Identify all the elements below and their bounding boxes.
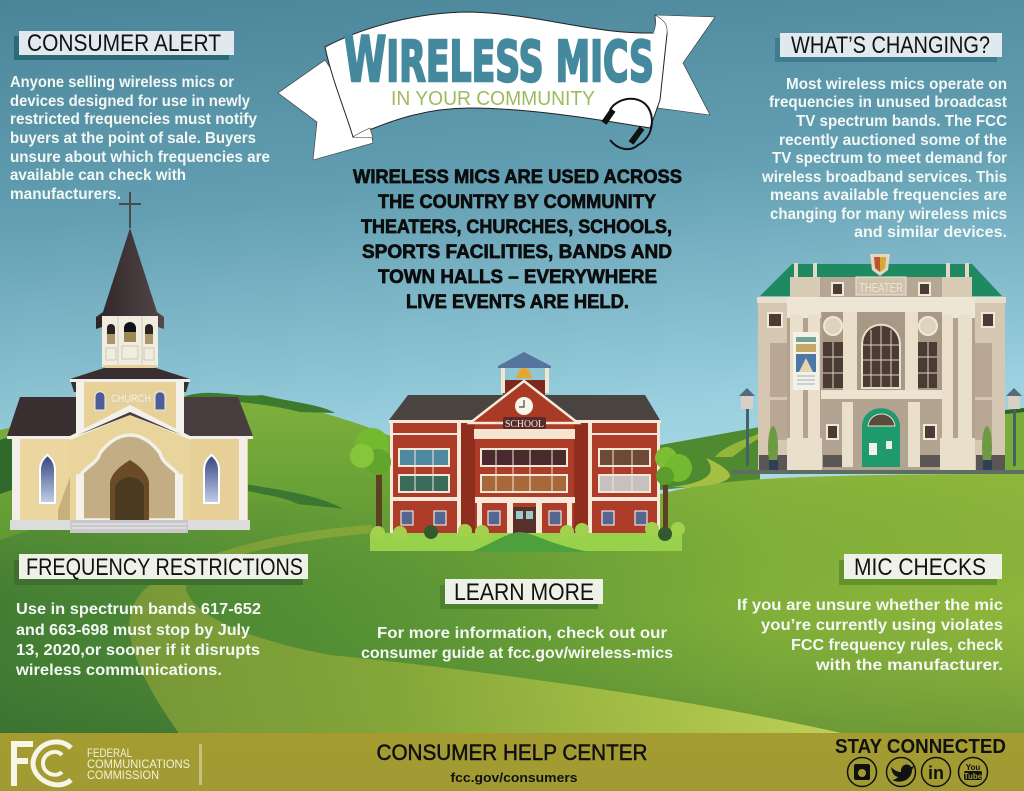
theater plinth stones bbox=[759, 455, 1005, 470]
body: what's changing: means available frequencies are bbox=[770, 187, 1007, 204]
body: learn more bbox=[361, 625, 673, 662]
icon: linkedin bbox=[922, 758, 950, 786]
heading: mic checks: MIC CHECKS bbox=[854, 554, 986, 581]
school walkway bbox=[470, 532, 590, 552]
school roof bbox=[389, 395, 660, 420]
body: consumer alert: manufacturers. bbox=[10, 186, 121, 203]
panel: frequency restrictions bbox=[14, 554, 308, 679]
body: learn more: For more information, check out our bbox=[377, 625, 667, 642]
school gable and clock bbox=[470, 381, 578, 439]
theater windows bbox=[768, 283, 994, 439]
icon: youtube bbox=[958, 758, 988, 786]
school entrance bbox=[475, 497, 575, 533]
theater poster bbox=[793, 332, 819, 390]
banner bbox=[278, 12, 715, 160]
body: what's changing: and similar devices. bbox=[854, 224, 1007, 241]
body: what's changing bbox=[761, 76, 1007, 241]
school sign: SCHOOL bbox=[505, 418, 544, 430]
body: what's changing: TV spectrum bands. The FCC bbox=[796, 113, 1007, 130]
theater crest bbox=[870, 254, 890, 276]
heading: frequency restrictions: FREQUENCY RESTRICTIONS bbox=[26, 554, 303, 581]
body: what's changing: changing for many wireless mics bbox=[770, 206, 1007, 223]
body: consumer alert: unsure about which frequencies are bbox=[10, 149, 270, 166]
panel: learn more bbox=[361, 579, 673, 662]
banner title: WIRELESS MICS bbox=[344, 23, 654, 96]
body: frequency restrictions: Use in spectrum bands 617-652 bbox=[16, 601, 261, 618]
body: mic checks bbox=[737, 597, 1003, 674]
logo: FCC bbox=[14, 742, 71, 786]
church cross bbox=[119, 192, 141, 228]
body: mic checks: FCC frequency rules, check bbox=[791, 637, 1003, 654]
panel: mic checks bbox=[737, 554, 1003, 674]
church tower wall bbox=[70, 368, 190, 438]
panel: what's changing bbox=[761, 32, 1007, 241]
icon: instagram bbox=[848, 758, 876, 786]
consumer help center bbox=[376, 740, 648, 785]
FCC name: FEDERAL bbox=[87, 748, 133, 760]
church roofs bbox=[7, 397, 253, 436]
theater columns bbox=[787, 312, 975, 470]
school shrubs bbox=[371, 522, 685, 541]
theater cypress trees bbox=[768, 426, 992, 470]
church spire bbox=[96, 228, 164, 329]
school cupola bbox=[498, 352, 551, 398]
school lower windows bbox=[401, 511, 647, 525]
building: church bbox=[7, 192, 253, 533]
body: frequency restrictions: wireless communications. bbox=[15, 662, 222, 679]
banner subtitle: IN YOUR COMMUNITY bbox=[391, 88, 595, 110]
icon: headset bbox=[604, 99, 652, 149]
heading: what's changing: WHAT’S CHANGING? bbox=[791, 32, 990, 59]
school trees bbox=[350, 428, 692, 532]
school classroom windows bbox=[398, 448, 651, 493]
body: consumer alert: available can check with bbox=[10, 167, 186, 184]
body: mic checks: you’re currently using violates bbox=[761, 617, 1003, 634]
icon: linkedin: in bbox=[928, 763, 944, 783]
body: frequency restrictions: 13, 2020,or sooner if it disrupts bbox=[16, 642, 260, 659]
central statement: THE COUNTRY BY COMMUNITY bbox=[378, 191, 656, 213]
body: mic checks: If you are unsure whether the mic bbox=[737, 597, 1003, 614]
landscape bbox=[0, 393, 1024, 740]
FCC name bbox=[87, 748, 190, 782]
church porch bbox=[68, 405, 192, 521]
body: frequency restrictions: and 663-698 must stop by July bbox=[16, 622, 250, 639]
body: consumer alert: Anyone selling wireless mics or bbox=[10, 74, 234, 91]
body: consumer alert bbox=[10, 74, 270, 203]
body: what's changing: TV spectrum to meet demand for bbox=[772, 150, 1007, 167]
central statement bbox=[353, 166, 682, 313]
school walls bbox=[389, 420, 661, 533]
icon: youtube: Tube bbox=[964, 772, 983, 781]
body: consumer alert: restricted frequencies must notify bbox=[10, 111, 257, 128]
body: what's changing: frequencies in unused broadcast bbox=[769, 94, 1007, 111]
icon: twitter bbox=[886, 758, 916, 786]
body: learn more: consumer guide at fcc.gov/wireless-mics bbox=[361, 645, 673, 662]
theater door bbox=[862, 408, 900, 467]
school lawn bbox=[370, 533, 682, 551]
theater roof bbox=[760, 264, 1002, 296]
winding road bbox=[129, 525, 850, 735]
footer band bbox=[0, 733, 1024, 791]
body: frequency restrictions bbox=[15, 601, 261, 679]
building: theater bbox=[732, 254, 1024, 474]
theater facade bbox=[757, 263, 1006, 470]
body: what's changing: Most wireless mics operate on bbox=[786, 76, 1007, 93]
FCC name: COMMUNICATIONS bbox=[87, 759, 190, 771]
church sign: CHURCH bbox=[111, 393, 151, 405]
body: consumer alert: devices designed for use in newly bbox=[10, 93, 250, 110]
church base and steps bbox=[10, 520, 250, 533]
FCC name: COMMISSION bbox=[87, 770, 159, 782]
panel: consumer alert bbox=[10, 30, 270, 203]
church main walls bbox=[7, 436, 253, 522]
central statement: LIVE EVENTS ARE HELD. bbox=[406, 291, 629, 313]
body: consumer alert: buyers at the point of sale. Buyers bbox=[10, 130, 256, 147]
consumer help center: CONSUMER HELP CENTER bbox=[376, 740, 648, 765]
building: school bbox=[350, 352, 692, 552]
church door bbox=[110, 460, 149, 520]
street lamps bbox=[739, 388, 1022, 466]
body: mic checks: with the manufacturer. bbox=[815, 657, 1003, 674]
central statement: TOWN HALLS – EVERYWHERE bbox=[378, 266, 657, 288]
icon: youtube: You bbox=[966, 763, 980, 772]
theater sign bbox=[856, 277, 906, 295]
theater pavement bbox=[732, 470, 1024, 474]
consumer help center: fcc.gov/consumers bbox=[450, 770, 578, 785]
theater sign: THEATER bbox=[859, 281, 903, 295]
stay connected: STAY CONNECTED bbox=[835, 736, 1006, 758]
central statement: THEATERS, CHURCHES, SCHOOLS, bbox=[361, 216, 672, 238]
heading: consumer alert: CONSUMER ALERT bbox=[27, 30, 221, 57]
church belfry bbox=[102, 315, 158, 373]
central statement: SPORTS FACILITIES, BANDS AND bbox=[362, 241, 672, 263]
central statement: WIRELESS MICS ARE USED ACROSS bbox=[353, 166, 682, 188]
heading: learn more: LEARN MORE bbox=[454, 579, 594, 606]
body: what's changing: recently auctioned some of the bbox=[779, 132, 1007, 149]
body: what's changing: wireless broadband services. This bbox=[761, 169, 1007, 186]
